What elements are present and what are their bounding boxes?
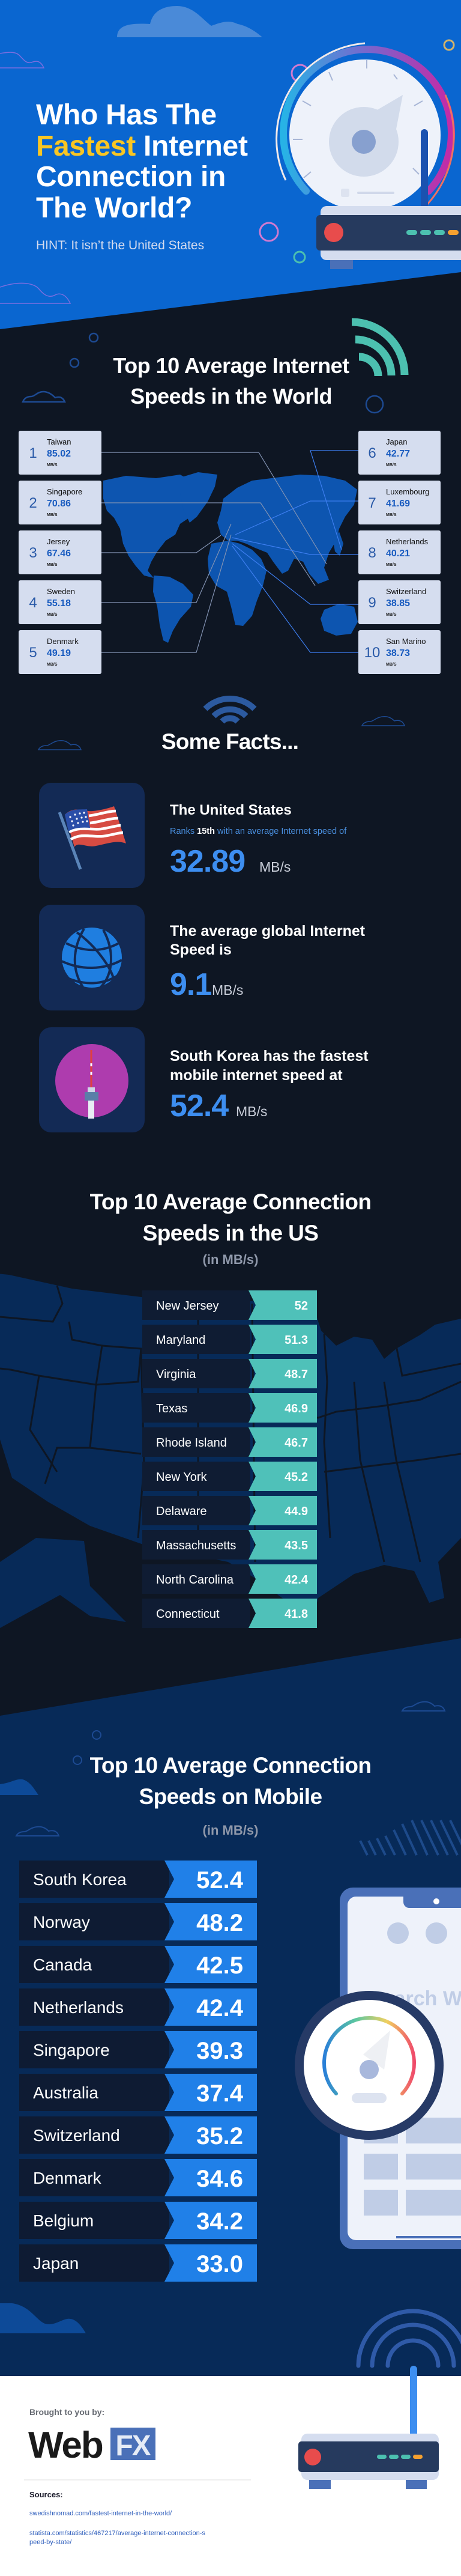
box: Netherlands: MB/S — [386, 563, 397, 567]
hero rings — [260, 40, 454, 263]
fact card: south korea: South Korea has the fastest — [170, 1048, 369, 1065]
row: Singapore — [19, 2031, 257, 2068]
box: Singapore: Singapore — [47, 487, 82, 496]
row: Netherlands: Netherlands — [33, 1998, 124, 2017]
row: Massachusetts — [142, 1530, 317, 1560]
us title — [90, 1189, 371, 1245]
box: Singapore: 2 — [29, 495, 37, 511]
row: New Jersey — [142, 1290, 317, 1320]
hero title: Connection in — [36, 161, 226, 193]
row: Delaware: Delaware — [156, 1505, 206, 1518]
icon: facts wifi — [205, 699, 255, 721]
phone illustration: Search W — [369, 1987, 461, 2010]
box: San Marino: 38.73 — [386, 648, 410, 658]
row: Belgium: Belgium — [33, 2211, 94, 2230]
fact card: south korea: MB/s — [236, 1104, 267, 1119]
row: Canada — [19, 1946, 257, 1983]
fact card: south korea: 52.4 — [170, 1089, 229, 1123]
box: Netherlands: 8 — [368, 545, 376, 561]
country boxes left — [19, 431, 101, 674]
row: Canada: Canada — [33, 1955, 92, 1974]
row: Australia — [19, 2074, 257, 2111]
box: Denmark: 49.19 — [47, 648, 71, 658]
logo: WebFX — [28, 2425, 155, 2466]
mobile gauge — [295, 1991, 444, 2140]
us map background — [0, 1274, 461, 1628]
row: Maryland — [142, 1325, 317, 1354]
box: Luxembourg: 41.69 — [386, 499, 410, 509]
sources: Sources: — [29, 2490, 63, 2499]
box: San Marino — [358, 630, 441, 674]
box: Luxembourg: Luxembourg — [386, 487, 429, 496]
phone illustration — [340, 1888, 461, 2249]
row: Norway — [19, 1903, 257, 1940]
box: Taiwan: 85.02 — [47, 449, 71, 459]
logo: WebFX: FX — [115, 2430, 151, 2462]
fact card: global speed: The average global Internet — [170, 923, 366, 940]
box: Japan: 6 — [368, 445, 376, 461]
row: Virginia — [142, 1359, 317, 1388]
row: Japan: Japan — [33, 2254, 79, 2273]
icon: wifi arcs bottom — [358, 2311, 461, 2366]
hatch lines — [360, 1820, 461, 1855]
row: Maryland: Maryland — [156, 1334, 205, 1347]
mobile blue clouds — [0, 1779, 86, 2333]
hero title: Who Has The — [36, 99, 217, 131]
box: Taiwan: MB/S — [47, 463, 58, 467]
box: Denmark — [19, 630, 101, 674]
sources — [29, 2490, 205, 2546]
box: Singapore: 70.86 — [47, 499, 71, 509]
sources: statista.com/statistics/467217/average-internet-connection-s — [29, 2530, 205, 2537]
row: North Carolina — [142, 1564, 317, 1594]
row: Switzerland: Switzerland — [33, 2126, 120, 2145]
connector lines left — [101, 452, 327, 652]
facts heading: Some Facts... — [161, 729, 298, 754]
row: Texas: Texas — [156, 1402, 187, 1415]
box: Sweden — [19, 580, 101, 624]
box: San Marino: 10 — [364, 645, 380, 661]
connector lines right — [232, 451, 358, 652]
row: Connecticut — [142, 1599, 317, 1628]
row: Rhode Island: Rhode Island — [156, 1436, 227, 1450]
icon: teal wifi — [352, 322, 405, 376]
row: Maryland: 51.3 — [285, 1334, 308, 1347]
row: Netherlands: 42.4 — [196, 1995, 244, 2022]
row: South Korea — [19, 1861, 257, 1898]
sources: peed-by-state/ — [29, 2539, 72, 2546]
row: Texas — [142, 1393, 317, 1423]
row: Delaware — [142, 1496, 317, 1525]
row: Switzerland — [19, 2116, 257, 2154]
box: Taiwan: 1 — [29, 445, 37, 461]
fact card: united states: 32.89 — [170, 844, 245, 879]
row: Norway: Norway — [33, 1913, 90, 1931]
box: Netherlands — [358, 530, 441, 574]
box: Netherlands: 40.21 — [386, 548, 410, 559]
row: Japan — [19, 2244, 257, 2282]
world title: Speeds in the World — [130, 384, 332, 409]
box: Jersey: 67.46 — [47, 548, 71, 559]
fact card: global speed: Speed is — [170, 941, 232, 958]
row: Denmark: 34.6 — [196, 2166, 243, 2192]
row: Virginia: 48.7 — [285, 1368, 308, 1381]
hero gauge illustration — [277, 43, 454, 211]
row: Australia: 37.4 — [196, 2080, 244, 2107]
icon: seoul tower — [55, 1044, 128, 1119]
us title: Speeds in the US — [143, 1221, 318, 1245]
row: Canada: 42.5 — [196, 1952, 243, 1979]
hero cloud — [117, 6, 262, 37]
row: Massachusetts: 43.5 — [285, 1539, 308, 1552]
hero router — [316, 129, 461, 269]
fact card: united states: The United States — [170, 802, 292, 818]
row: Japan: 33.0 — [196, 2251, 243, 2277]
icon: globe — [62, 928, 122, 988]
box: Luxembourg — [358, 481, 441, 524]
box: Switzerland: Switzerland — [386, 587, 426, 596]
row: New Jersey: 52 — [295, 1299, 308, 1313]
box: Sweden: 4 — [29, 595, 37, 611]
box: Japan: Japan — [386, 437, 407, 446]
box: Denmark: 5 — [29, 645, 37, 661]
box: Denmark: Denmark — [47, 637, 79, 646]
footer router — [298, 2366, 439, 2489]
box: Netherlands: Netherlands — [386, 537, 429, 546]
world section decorations — [23, 333, 383, 413]
mobile title — [90, 1753, 371, 1809]
box: Switzerland: 38.85 — [386, 598, 410, 609]
row: Netherlands — [19, 1988, 257, 2026]
box: Taiwan — [19, 431, 101, 475]
sources: swedishnomad.com/fastest-internet-in-the-world/ — [29, 2510, 172, 2517]
row: Virginia: Virginia — [156, 1368, 196, 1381]
row: Denmark — [19, 2159, 257, 2196]
fact card: united states — [39, 783, 347, 888]
row: Delaware: 44.9 — [285, 1505, 308, 1518]
box: Luxembourg: MB/S — [386, 513, 397, 517]
fact card: south korea: mobile internet speed at — [170, 1067, 343, 1084]
row: Australia: Australia — [33, 2083, 98, 2102]
box: Jersey: 3 — [29, 545, 37, 561]
row: Singapore: 39.3 — [196, 2038, 243, 2064]
facts cloud outlines — [38, 717, 405, 750]
box: Luxembourg: 7 — [368, 495, 376, 511]
row: New Jersey: New Jersey — [156, 1299, 218, 1313]
box: Sweden: MB/S — [47, 613, 58, 617]
footer credit — [28, 2407, 155, 2466]
row: Connecticut: Connecticut — [156, 1608, 220, 1621]
hero title — [36, 99, 248, 224]
box: Singapore: MB/S — [47, 513, 58, 517]
row: Switzerland: 35.2 — [196, 2123, 243, 2149]
world title — [113, 353, 349, 409]
box: Jersey: MB/S — [47, 563, 58, 567]
row: Belgium — [19, 2202, 257, 2239]
box: Sweden: 55.18 — [47, 598, 71, 609]
mobile unit label: (in MB/s) — [203, 1823, 258, 1838]
logo: WebFX: Web — [28, 2425, 103, 2466]
box: San Marino: MB/S — [386, 663, 397, 667]
mobile title: Speeds on Mobile — [139, 1784, 322, 1809]
mobile bar table — [19, 1861, 257, 2282]
row: Denmark: Denmark — [33, 2169, 102, 2187]
row: South Korea: 52.4 — [196, 1867, 244, 1894]
us title: Top 10 Average Connection — [90, 1189, 371, 1214]
box: Jersey: Jersey — [47, 537, 70, 546]
world map — [103, 472, 358, 643]
hero title: The World? — [36, 192, 192, 224]
row: Connecticut: 41.8 — [285, 1608, 308, 1621]
box: Taiwan: Taiwan — [47, 437, 71, 446]
fact card: united states: MB/s — [259, 859, 291, 875]
box: Switzerland: 9 — [368, 595, 376, 611]
mobile decorations — [16, 1702, 445, 1836]
row: Singapore: Singapore — [33, 2041, 110, 2059]
footer background — [0, 2376, 461, 2576]
dark background — [0, 258, 461, 1730]
row: South Korea: South Korea — [33, 1870, 127, 1889]
box: Switzerland — [358, 580, 441, 624]
row: Massachusetts: Massachusetts — [156, 1539, 236, 1552]
box: Singapore — [19, 481, 101, 524]
mobile title: Top 10 Average Connection — [90, 1753, 371, 1778]
fact card: global speed: 9.1 — [170, 967, 211, 1002]
navy mobile background — [0, 1638, 461, 2376]
row: New York: New York — [156, 1471, 207, 1484]
row: North Carolina: 42.4 — [285, 1573, 309, 1587]
row: Norway: 48.2 — [196, 1910, 243, 1936]
fact card: south korea — [39, 1027, 369, 1132]
fact card: united states: Ranks 15th with an average Internet speed of — [170, 827, 347, 836]
world title: Top 10 Average Internet — [113, 353, 349, 378]
us unit label: (in MB/s) — [203, 1252, 258, 1267]
box: Japan: 42.77 — [386, 449, 410, 459]
box: Denmark: MB/S — [47, 663, 58, 667]
box: Switzerland: MB/S — [386, 613, 397, 617]
row: Rhode Island: 46.7 — [285, 1436, 308, 1450]
box: Sweden: Sweden — [47, 587, 75, 596]
country boxes right — [358, 431, 441, 674]
row: New York: 45.2 — [285, 1471, 308, 1484]
hero hint: HINT: It isn’t the United States — [36, 238, 204, 252]
row: New York — [142, 1462, 317, 1491]
footer credit: Brought to you by: — [29, 2407, 104, 2417]
box: Jersey — [19, 530, 101, 574]
fact card: global speed: MB/s — [212, 982, 243, 998]
row: Belgium: 34.2 — [196, 2208, 243, 2235]
icon: us flag — [59, 806, 126, 869]
hero title: Fastest Internet — [36, 130, 248, 162]
hero background — [0, 0, 461, 329]
us bar table — [142, 1290, 317, 1628]
fact card: global speed — [39, 905, 366, 1010]
hero cloud outlines — [0, 52, 70, 303]
box: San Marino: San Marino — [386, 637, 426, 646]
row: Texas: 46.9 — [285, 1402, 308, 1415]
row: Rhode Island — [142, 1427, 317, 1457]
row: North Carolina: North Carolina — [156, 1573, 234, 1587]
box: Japan: MB/S — [386, 463, 397, 467]
box: Japan — [358, 431, 441, 475]
